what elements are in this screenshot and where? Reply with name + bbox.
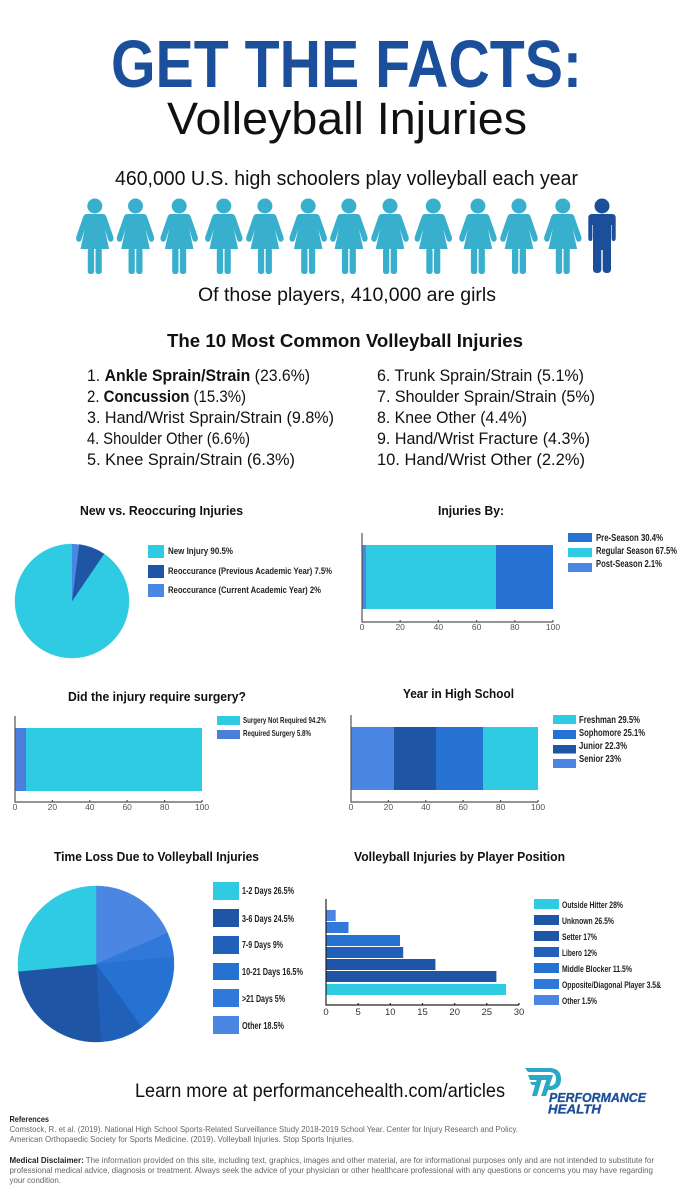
stacked bar chart: 100 (195, 802, 209, 812)
stacked bar chart: 0 (349, 802, 354, 812)
legend: Setter 17% (562, 932, 597, 943)
call to action: Learn more at performancehealth.com/articles (135, 1080, 505, 1102)
heading: Injuries By: (438, 503, 504, 518)
stacked bar chart: 100 (531, 802, 545, 812)
legend (553, 714, 645, 768)
list: injuries 6 to 10: 6. Trunk Sprain/Strain (5.1%) (377, 367, 584, 385)
references: Comstock, R. et al. (2019). National High School Sports-Related Surveillance Study 2018-2019 School Year. Center for Injury Research and Policy. (10, 1124, 518, 1134)
panel: time loss due to injuries (18, 849, 303, 1042)
stacked bar chart: 0 (13, 802, 18, 812)
list: injuries 6 to 10: 9. Hand/Wrist Fracture (4.3%) (377, 430, 590, 448)
legend: Outside Hitter 28% (562, 900, 623, 911)
stacked bar chart: 60 (472, 622, 482, 632)
stacked bar chart: 20 (384, 802, 393, 812)
list: injuries 6 to 10: 8. Knee Other (4.4%) (377, 409, 527, 427)
medical disclaimer (10, 1155, 654, 1185)
horizontal bar chart (323, 899, 524, 1018)
horizontal bar chart: 20 (449, 1007, 460, 1018)
medical disclaimer: professional medical advice, diagnosis or treatment. Always seek the advice of your physician or other healthcare professional with any questions or concerns you may have regarding (10, 1165, 653, 1175)
legend: Freshman 29.5% (579, 714, 640, 726)
subtitle: Volleyball Injuries (167, 93, 527, 144)
legend: 1-2 Days 26.5% (242, 886, 294, 897)
panel: year in high school (349, 686, 645, 812)
legend: Sophomore 25.1% (579, 727, 645, 739)
list: injuries 1 to 5: 1. Ankle Sprain/Strain (23.6%) (87, 367, 310, 385)
stacked bar chart (349, 715, 545, 812)
stacked bar chart: 80 (160, 802, 170, 812)
heading: Volleyball Injuries by Player Position (354, 849, 565, 864)
stacked bar chart: 40 (421, 802, 431, 812)
list: injuries 6 to 10 (377, 367, 595, 469)
wordmark: HEALTH (548, 1102, 602, 1116)
list: injuries 1 to 5: 5. Knee Sprain/Strain (6.3%) (87, 451, 295, 469)
horizontal bar chart: 15 (417, 1007, 428, 1018)
legend (568, 532, 677, 572)
heading: top 10 injuries: The 10 Most Common Volleyball Injuries (167, 331, 523, 351)
list: injuries 1 to 5 (87, 367, 334, 469)
stacked bar chart: 40 (85, 802, 95, 812)
legend: Other 1.5% (562, 996, 597, 1007)
stacked bar chart (13, 716, 209, 812)
stacked bar chart: 80 (496, 802, 506, 812)
logo: performance health (525, 1068, 646, 1116)
stacked bar chart: 100 (546, 622, 560, 632)
legend: Junior 22.3% (579, 740, 627, 752)
pictogram: 12 girls and 1 boy (76, 198, 616, 274)
stacked bar chart: 20 (395, 622, 405, 632)
legend (148, 545, 332, 597)
legend: Surgery Not Required 94.2% (243, 715, 326, 725)
horizontal bar chart: 0 (323, 1007, 329, 1018)
heading: Time Loss Due to Volleyball Injuries (54, 849, 259, 864)
references: References (10, 1114, 49, 1124)
legend: 3-6 Days 24.5% (242, 914, 294, 925)
heading: New vs. Reoccuring Injuries (80, 503, 243, 518)
stacked bar chart: 40 (434, 622, 443, 632)
legend: 7-9 Days 9% (242, 940, 283, 951)
horizontal bar chart: 30 (514, 1007, 524, 1018)
legend: Middle Blocker 11.5% (562, 964, 632, 975)
list: injuries 1 to 5: 3. Hand/Wrist Sprain/Strain (9.8%) (87, 409, 334, 427)
legend (217, 715, 326, 739)
legend (534, 899, 661, 1007)
list: injuries 1 to 5: 4. Shoulder Other (6.6%) (87, 430, 250, 448)
references (10, 1114, 518, 1144)
legend: >21 Days 5% (242, 994, 285, 1005)
legend (213, 882, 303, 1034)
list: injuries 6 to 10: 10. Hand/Wrist Other (2.2%) (377, 451, 585, 469)
list: injuries 6 to 10: 7. Shoulder Sprain/Strain (5%) (377, 388, 595, 406)
legend: Reoccurance (Current Academic Year) 2% (168, 585, 321, 596)
medical disclaimer: Medical Disclaimer: The information provided on this site, including text, graphics, images and other material, are for informational purposes only and are not intended to substitute for (10, 1155, 654, 1165)
pie chart (18, 886, 174, 1042)
panel: new vs reoccuring injuries (15, 503, 332, 658)
wordmark (548, 1090, 646, 1116)
stacked bar chart (360, 533, 560, 632)
stacked bar chart: 20 (48, 802, 57, 812)
medical disclaimer: your condition. (10, 1175, 61, 1185)
wordmark: PERFORMANCE (549, 1090, 646, 1105)
pie chart (15, 544, 129, 658)
stacked bar chart: 60 (122, 802, 132, 812)
legend: Required Surgery 5.8% (243, 728, 311, 738)
legend: Senior 23% (579, 753, 621, 765)
horizontal bar chart: 5 (356, 1007, 361, 1018)
horizontal bar chart: 10 (385, 1007, 396, 1018)
legend: Libero 12% (562, 948, 597, 959)
legend: Reoccurance (Previous Academic Year) 7.5% (168, 566, 332, 577)
panel: injuries by player position (323, 849, 661, 1018)
legend: 10-21 Days 16.5% (242, 967, 303, 978)
icon: logo mark (525, 1068, 561, 1096)
panel: injuries by season (360, 503, 677, 632)
stat: total players: 460,000 U.S. high schoolers play volleyball each year (115, 168, 578, 190)
panel: did the injury require surgery (13, 689, 326, 812)
title: GET THE FACTS: (111, 27, 582, 102)
horizontal bar chart: 25 (482, 1007, 492, 1018)
stacked bar chart: 0 (360, 622, 365, 632)
legend: Unknown 26.5% (562, 916, 614, 927)
stacked bar chart: 60 (458, 802, 468, 812)
legend: Other 18.5% (242, 1021, 284, 1032)
references: American Orthopaedic Society for Sports Medicine. (2019). Volleyball Injuries. Stop Sports Injuries. (10, 1134, 354, 1144)
heading: Did the injury require surgery? (68, 689, 246, 704)
list: injuries 1 to 5: 2. Concussion (15.3%) (87, 388, 246, 406)
stacked bar chart: 80 (510, 622, 520, 632)
heading: Year in High School (403, 686, 514, 701)
legend: New Injury 90.5% (168, 546, 233, 557)
stat: girls: Of those players, 410,000 are girls (198, 285, 496, 306)
